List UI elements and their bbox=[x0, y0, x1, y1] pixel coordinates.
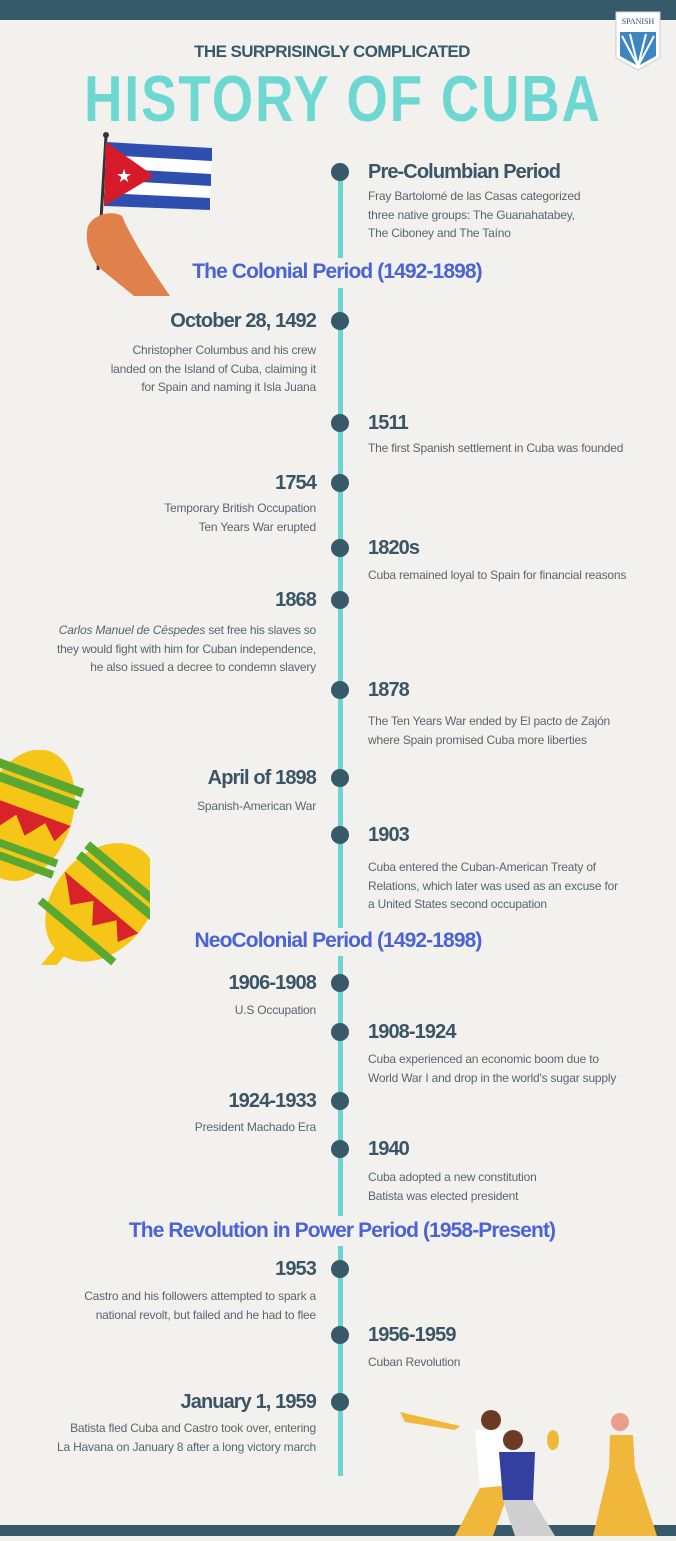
entry: 1924-1933 bbox=[331, 1092, 349, 1110]
text: Cuban Revolution bbox=[368, 1355, 460, 1369]
entry: 1754 bbox=[331, 474, 349, 492]
entry: October 28, 1492: landed on the Island of Cuba, claiming it bbox=[111, 362, 316, 376]
title: HISTORY OF CUBA bbox=[84, 64, 602, 136]
text: Cuba experienced an economic boom due to bbox=[368, 1052, 599, 1066]
entry: 1820s bbox=[331, 539, 349, 557]
text: they would fight with him for Cuban independence, bbox=[57, 642, 316, 656]
text: President Machado Era bbox=[195, 1120, 316, 1134]
text: Castro and his followers attempted to spark a bbox=[84, 1289, 316, 1303]
text: he also issued a decree to condemn slavery bbox=[90, 660, 316, 674]
logo bbox=[616, 12, 660, 70]
text: Temporary British Occupation bbox=[164, 501, 316, 515]
text: where Spain promised Cuba more liberties bbox=[368, 732, 587, 746]
text: Carlos Manuel de Céspedes set free his slaves so bbox=[59, 623, 316, 637]
entry: 1953 bbox=[331, 1260, 349, 1278]
section: Revolution: The Revolution in Power Period (1958-Present) bbox=[129, 1219, 555, 1242]
entry: 1908-1924 bbox=[331, 1023, 349, 1041]
entry: January 1, 1959 bbox=[331, 1393, 349, 1411]
subtitle: THE SURPRISINGLY COMPLICATED bbox=[194, 42, 470, 61]
text: a United States second occupation bbox=[368, 897, 547, 911]
text: Relations, which later was used as an excuse for bbox=[368, 878, 618, 892]
entry: October 28, 1492: Christopher Columbus and his crew bbox=[133, 343, 316, 357]
text: La Havana on January 8 after a long victory march bbox=[57, 1440, 316, 1454]
text: 1820s bbox=[368, 537, 419, 559]
entry: April of 1898 bbox=[331, 769, 349, 787]
entry: October 28, 1492: October 28, 1492 bbox=[170, 310, 316, 332]
entry: 1868 bbox=[331, 591, 349, 609]
text: 1903 bbox=[368, 824, 409, 846]
icon: maracas bbox=[0, 750, 150, 965]
text: April of 1898 bbox=[208, 767, 316, 789]
text: Spanish-American War bbox=[197, 799, 316, 813]
entry: October 28, 1492: for Spain and naming it Isla Juana bbox=[141, 380, 316, 394]
entry: 1903 bbox=[331, 826, 349, 844]
text: 1906-1908 bbox=[228, 972, 316, 994]
top bar bbox=[0, 0, 676, 20]
timeline line segments bbox=[338, 178, 343, 258]
text: The Ten Years War ended by El pacto de Zajón bbox=[368, 714, 610, 728]
entry: Pre-Columbian: three native groups: The Guanahatabey, bbox=[368, 208, 575, 222]
entry: 1511 bbox=[331, 414, 349, 432]
logo: SPANISH bbox=[622, 17, 655, 26]
icon: musicians bbox=[400, 1410, 657, 1536]
text: 1878 bbox=[368, 679, 409, 701]
bottom bar bbox=[0, 1525, 676, 1536]
entry: Pre-Columbian bbox=[331, 161, 580, 240]
entry: Pre-Columbian: Fray Bartolomé de las Casas categorized bbox=[368, 189, 580, 203]
text: The first Spanish settlement in Cuba was founded bbox=[368, 441, 623, 455]
text: Ten Years War erupted bbox=[199, 520, 316, 534]
entry: Pre-Columbian: Pre-Columbian Period bbox=[368, 161, 560, 183]
entry: 1906-1908 bbox=[331, 974, 349, 992]
text: 1940 bbox=[368, 1138, 409, 1160]
text: 1868 bbox=[275, 589, 316, 611]
text: U.S Occupation bbox=[235, 1003, 316, 1017]
text: 1924-1933 bbox=[228, 1090, 316, 1112]
section: Colonial: The Colonial Period (1492-1898) bbox=[192, 260, 482, 283]
entry: Pre-Columbian: The Ciboney and The Taíno bbox=[368, 226, 511, 240]
text: Batista was elected president bbox=[368, 1188, 518, 1202]
text: 1754 bbox=[275, 472, 316, 494]
text: 1511 bbox=[368, 412, 408, 434]
text: Cuba entered the Cuban-American Treaty of bbox=[368, 860, 596, 874]
text: January 1, 1959 bbox=[180, 1391, 316, 1413]
text: 1908-1924 bbox=[368, 1021, 456, 1043]
text: Cuba adopted a new constitution bbox=[368, 1170, 537, 1184]
text: 1953 bbox=[275, 1258, 316, 1280]
text: national revolt, but failed and he had to flee bbox=[96, 1308, 316, 1322]
text: Batista fled Cuba and Castro took over, entering bbox=[70, 1421, 316, 1435]
text: 1956-1959 bbox=[368, 1324, 456, 1346]
section: NeoColonial: NeoColonial Period (1492-1898) bbox=[195, 929, 481, 952]
icon: flag in hand: ★ bbox=[116, 166, 132, 186]
icon: flag in hand bbox=[86, 132, 212, 296]
entry: October 28, 1492 bbox=[111, 310, 349, 394]
text: Cuba remained loyal to Spain for financial reasons bbox=[368, 568, 626, 582]
entry: 1878 bbox=[331, 681, 349, 699]
text: World War I and drop in the world's sugar supply bbox=[368, 1070, 616, 1084]
entry: 1956-1959 bbox=[331, 1326, 349, 1344]
entry: 1940 bbox=[331, 1140, 349, 1158]
